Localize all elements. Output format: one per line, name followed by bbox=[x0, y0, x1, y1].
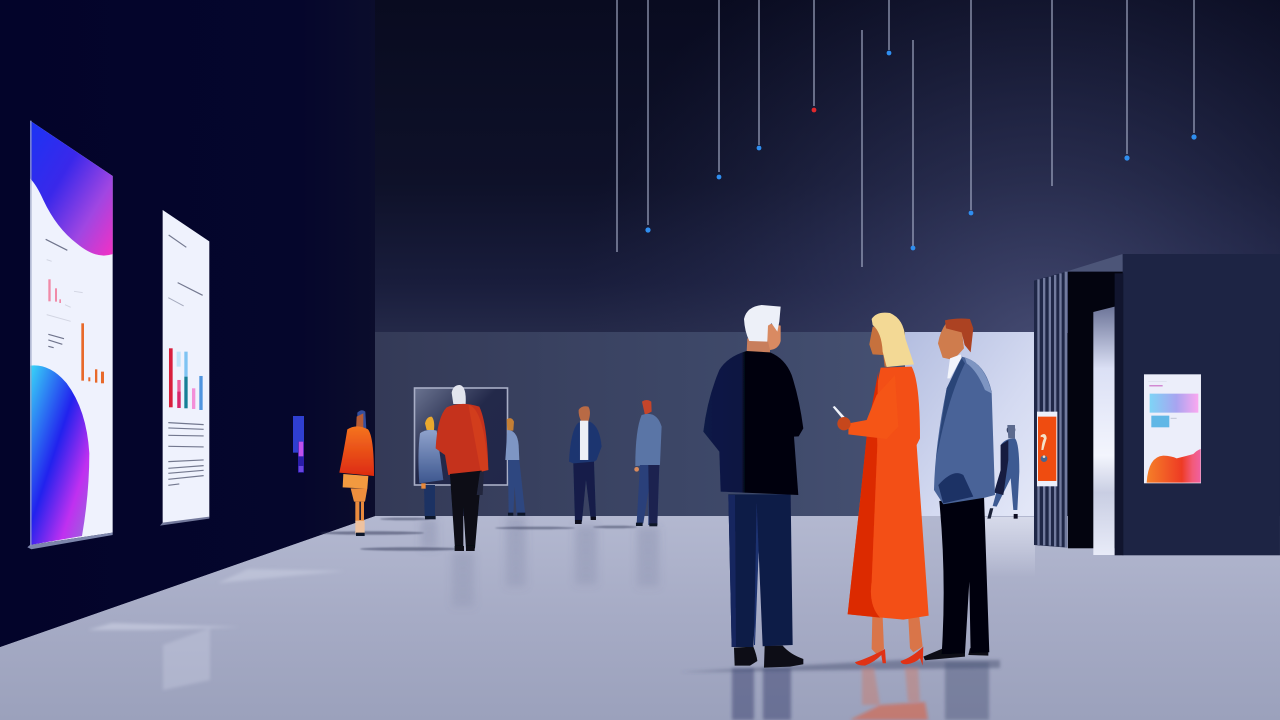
poster: gradient bands and hill bbox=[1144, 374, 1201, 483]
neck bbox=[747, 338, 770, 354]
far figure: side viewer bbox=[505, 418, 525, 516]
small far wall screen bbox=[293, 416, 304, 473]
framed dark picture bbox=[414, 388, 508, 485]
face bbox=[938, 323, 964, 360]
far figure: woman in orange cape bbox=[339, 410, 374, 536]
dress shadow bbox=[848, 372, 880, 618]
poster base rail bbox=[27, 533, 113, 549]
shirt bbox=[947, 354, 962, 378]
far figure: man in blue suit bbox=[634, 400, 662, 526]
jacket bbox=[934, 357, 995, 504]
bar chart bbox=[169, 348, 203, 410]
foreground group bbox=[703, 305, 995, 668]
shoes bbox=[734, 647, 757, 666]
trousers bbox=[939, 495, 989, 654]
lit doorway bbox=[1093, 307, 1115, 555]
face bbox=[767, 323, 781, 350]
far figure: man in navy suit bbox=[569, 406, 602, 524]
trousers bbox=[728, 494, 793, 647]
jacket bbox=[703, 351, 803, 495]
hair bbox=[744, 305, 781, 342]
floor highlights bbox=[88, 569, 345, 690]
bright floor behind group bbox=[985, 517, 1035, 577]
poster bottom gradient shape bbox=[30, 365, 89, 545]
far figure: man in red jacket bbox=[436, 385, 488, 551]
left wall bbox=[0, 0, 375, 647]
hair bbox=[945, 319, 973, 352]
shoes bbox=[923, 648, 965, 660]
man with white hair bbox=[703, 305, 803, 668]
far figures shadows bbox=[320, 518, 637, 551]
face and hair bbox=[869, 327, 890, 367]
heels bbox=[855, 649, 886, 666]
floor bbox=[0, 516, 1280, 720]
text lines bbox=[168, 235, 204, 485]
main group reflections bbox=[680, 660, 1000, 720]
man in blue jacket bbox=[923, 319, 995, 660]
legs bbox=[872, 617, 884, 654]
back wall bbox=[375, 332, 1035, 517]
bright opening bbox=[905, 332, 1035, 518]
arm bbox=[848, 375, 898, 439]
striped panel bbox=[1034, 271, 1067, 548]
black portal bbox=[1068, 272, 1123, 548]
pavilion: right structure bbox=[1034, 254, 1280, 555]
far figure: woman at picture bbox=[418, 417, 443, 519]
poster top gradient shape bbox=[30, 121, 113, 256]
main block bbox=[1123, 254, 1280, 555]
dress bbox=[848, 367, 929, 620]
woman in orange dress bbox=[833, 313, 929, 666]
pavilion roof bbox=[1066, 254, 1123, 272]
poster small charts bbox=[46, 239, 104, 383]
walking figure in bright opening bbox=[987, 425, 1019, 519]
poster: large gradient panel bbox=[27, 121, 113, 549]
poster: bar chart panel bbox=[160, 210, 209, 526]
hanging light strings bbox=[617, 0, 1197, 267]
floor reflections bbox=[421, 517, 659, 607]
ceiling and upper wall bbox=[375, 0, 1280, 333]
poster: orange question bbox=[1037, 412, 1057, 486]
hand and phone bbox=[833, 406, 845, 419]
